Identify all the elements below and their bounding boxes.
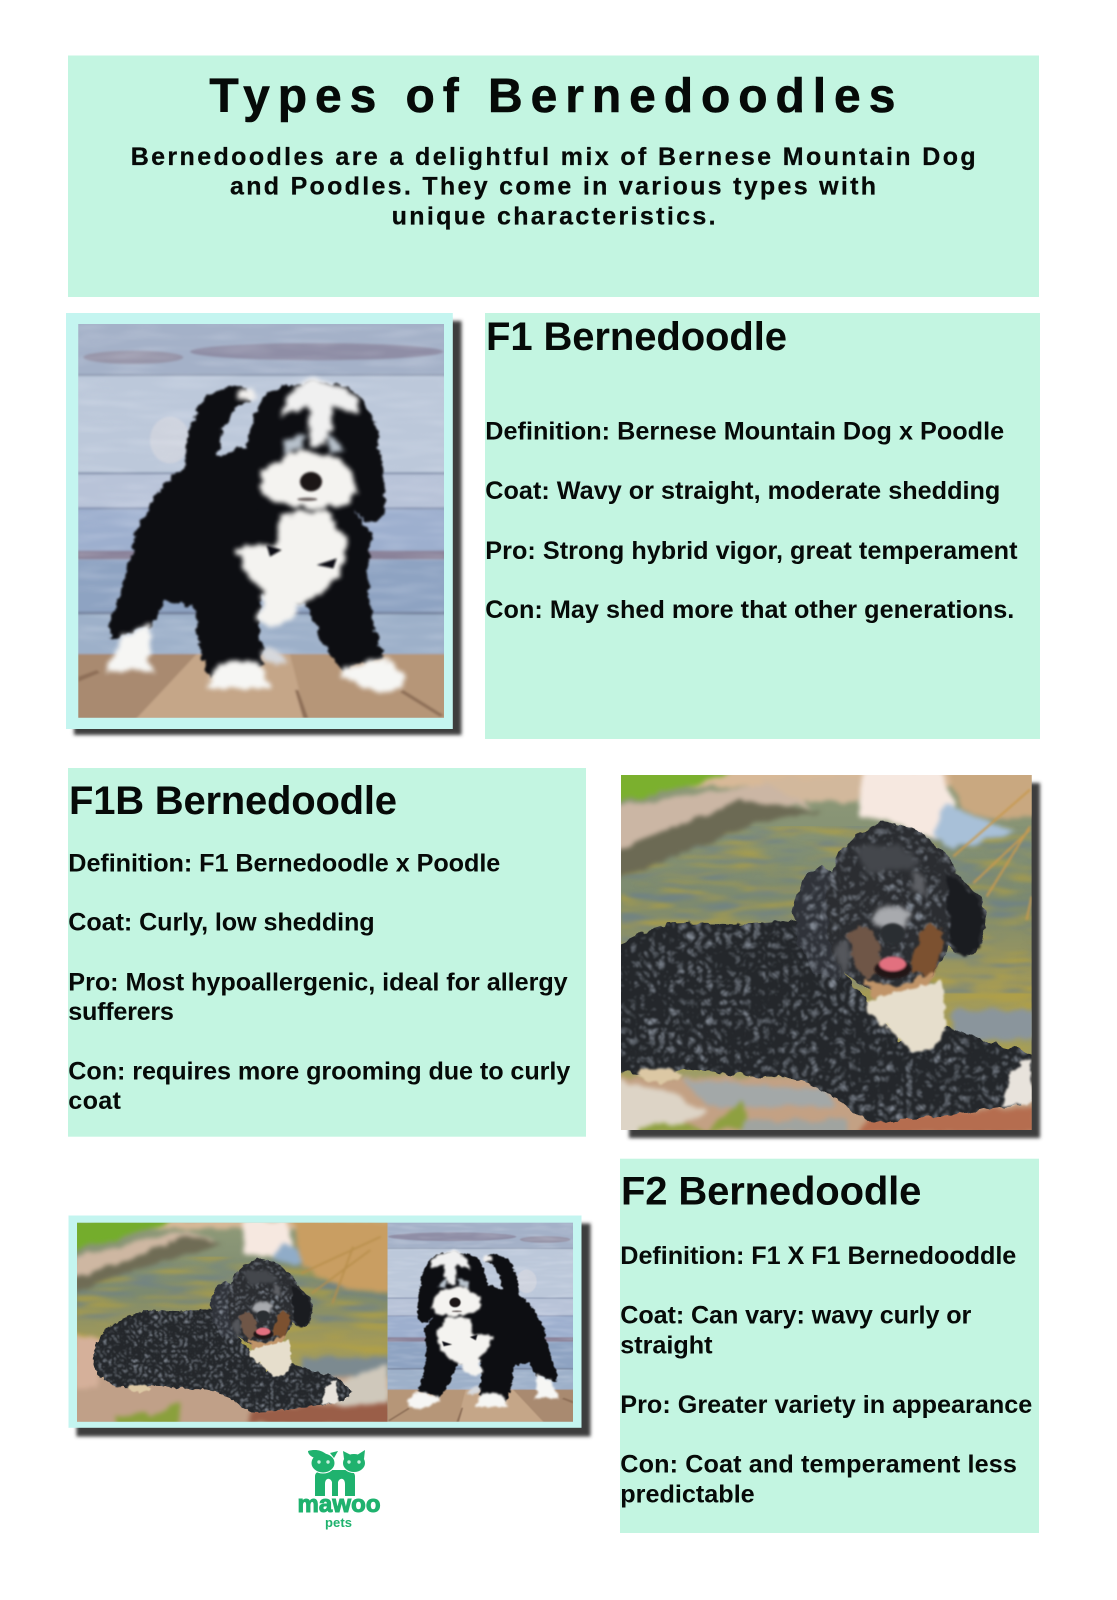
- heading: F1: F1 Bernedoodle: [486, 315, 787, 359]
- F2 details: Con: Coat and temperament less: [620, 1450, 1017, 1478]
- photo: F2 parents side by side in aqua frame: [68, 1216, 590, 1436]
- F1 details: Pro: Strong hybrid vigor, great temperament: [485, 537, 1018, 565]
- F1B details: Pro: Most hypoallergenic, ideal for allergy: [68, 969, 568, 997]
- F1B details: Definition: F1 Bernedoodle x Poodle: [68, 850, 500, 878]
- F1 details: [485, 417, 1018, 624]
- F1 details: Definition: Bernese Mountain Dog x Poodle: [485, 417, 1004, 445]
- panel: title banner: [68, 56, 1039, 297]
- F1B details: [68, 850, 570, 1115]
- logo: mawoo pets: [298, 1450, 380, 1530]
- F2 details: Definition: F1 X F1 Bernedooddle: [620, 1242, 1016, 1270]
- F1B details: Con: requires more grooming due to curly: [68, 1058, 570, 1086]
- F1 details: Coat: Wavy or straight, moderate shedding: [485, 477, 1000, 505]
- F1B details: coat: [68, 1087, 122, 1115]
- intro text: and Poodles. They come in various types with: [230, 173, 876, 201]
- logo subtitle: pets: [325, 1515, 352, 1530]
- F2 details: straight: [620, 1332, 713, 1360]
- F1B details: sufferers: [68, 998, 174, 1026]
- heading: F1B: F1B Bernedoodle: [69, 779, 397, 823]
- icon: dog and cat mascot: [308, 1450, 366, 1496]
- F1 details: Con: May shed more that other generations.: [485, 596, 1014, 624]
- intro text: Bernedoodles are a delightful mix of Bernese Mountain Dog: [131, 143, 976, 171]
- photo: F1 puppy in aqua frame: [66, 313, 462, 735]
- F2 details: predictable: [620, 1480, 755, 1508]
- title: Types of Bernedoodles: [209, 70, 895, 123]
- intro text: unique characteristics.: [392, 202, 716, 230]
- F2 details: Pro: Greater variety in appearance: [620, 1391, 1032, 1419]
- heading: F2: F2 Bernedoodle: [621, 1170, 921, 1214]
- intro text: [131, 143, 976, 230]
- F2 details: [620, 1242, 1032, 1508]
- photo: F1B curly dog by water: [572, 766, 1059, 1138]
- logo wordmark: mawoo: [298, 1491, 380, 1518]
- panel: F2 Bernedoodle: [620, 1159, 1039, 1533]
- F2 details: Coat: Can vary: wavy curly or: [620, 1302, 971, 1330]
- panel: F1 Bernedoodle: [485, 313, 1040, 739]
- F1B details: Coat: Curly, low shedding: [68, 909, 375, 937]
- panel: F1B Bernedoodle: [68, 768, 586, 1137]
